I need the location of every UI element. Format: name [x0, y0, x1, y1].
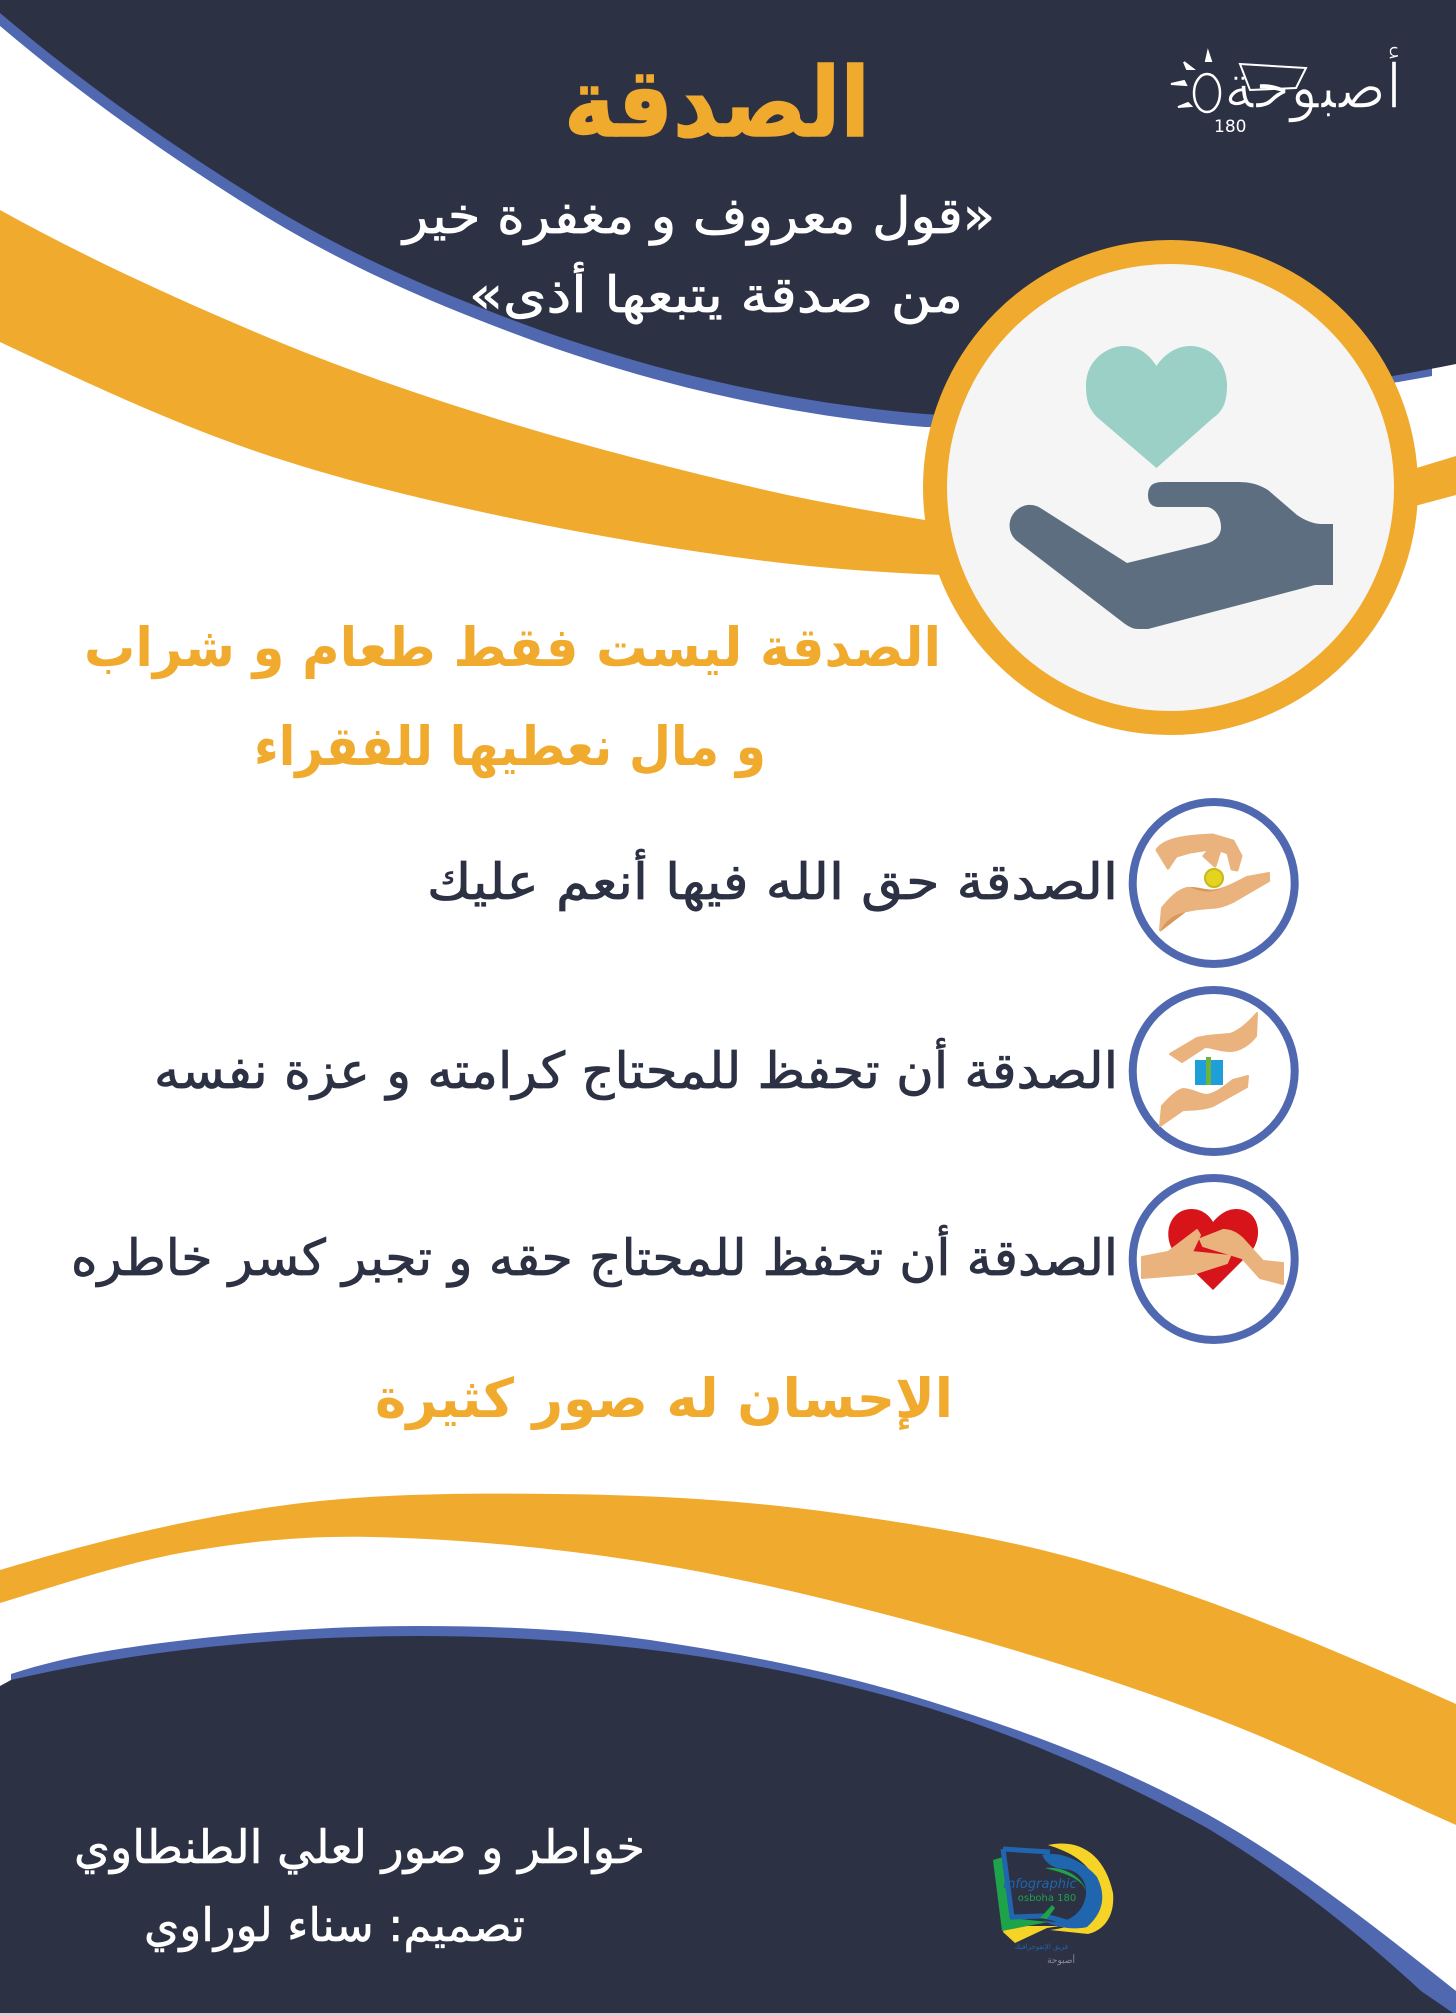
title: الصدقة [564, 47, 870, 159]
icon: open hand [1010, 482, 1333, 629]
footer logo: infographic osboha 180: Infographic [1003, 1877, 1077, 1892]
item 2 text: الصدقة أن تحفظ للمحتاج كرامته و عزة نفسه [154, 1038, 1118, 1101]
bottom orange swoosh band [0, 1494, 1456, 1825]
quote text: من صدقة يتبعها أذى» [469, 262, 963, 325]
item 3 icon: hands over heart [1133, 1178, 1295, 1340]
orange closing line: الإحسان له صور كثيرة [375, 1367, 953, 1430]
logo: osboha 180 [1171, 46, 1402, 137]
top header shape with blue edge [0, 0, 1456, 427]
item 3 text: الصدقة أن تحفظ للمحتاج حقه و تجبر كسر خاطره [71, 1225, 1118, 1288]
footer credits: تصميم: سناء لوراوي [144, 1898, 525, 1953]
footer credits [74, 1820, 645, 1953]
quote text: «قول معروف و مغفرة خير [400, 187, 995, 246]
item 1 text: الصدقة حق الله فيها أنعم عليك [427, 849, 1118, 912]
logo: osboha 180: أصبوحة [1224, 46, 1402, 123]
orange subheading: الصدقة ليست فقط طعام و شراب [84, 616, 941, 679]
orange subheading [84, 616, 941, 778]
top orange swoosh band [0, 210, 1456, 575]
item 1 icon: coin in hand [1133, 802, 1295, 964]
footer logo: infographic osboha 180: أصبوحة [1047, 1954, 1075, 1966]
item 2 icon: gift between hands [1133, 990, 1295, 1152]
quote text [400, 187, 995, 325]
footer credits: خواطر و صور لعلي الطنطاوي [74, 1820, 645, 1875]
footer logo: infographic osboha 180: فريق الإنفوجرافيك [1014, 1943, 1068, 1951]
logo: osboha 180: 180 [1214, 117, 1246, 137]
footer logo: infographic osboha 180: osboha 180 [1018, 1893, 1076, 1904]
icon: heart [1086, 346, 1227, 468]
footer shape with blue edge [0, 1626, 1456, 2015]
main circle with hand and heart icon [935, 252, 1406, 723]
orange subheading: و مال نعطيها للفقراء [254, 715, 766, 778]
footer logo: infographic osboha 180 [993, 1843, 1113, 1966]
